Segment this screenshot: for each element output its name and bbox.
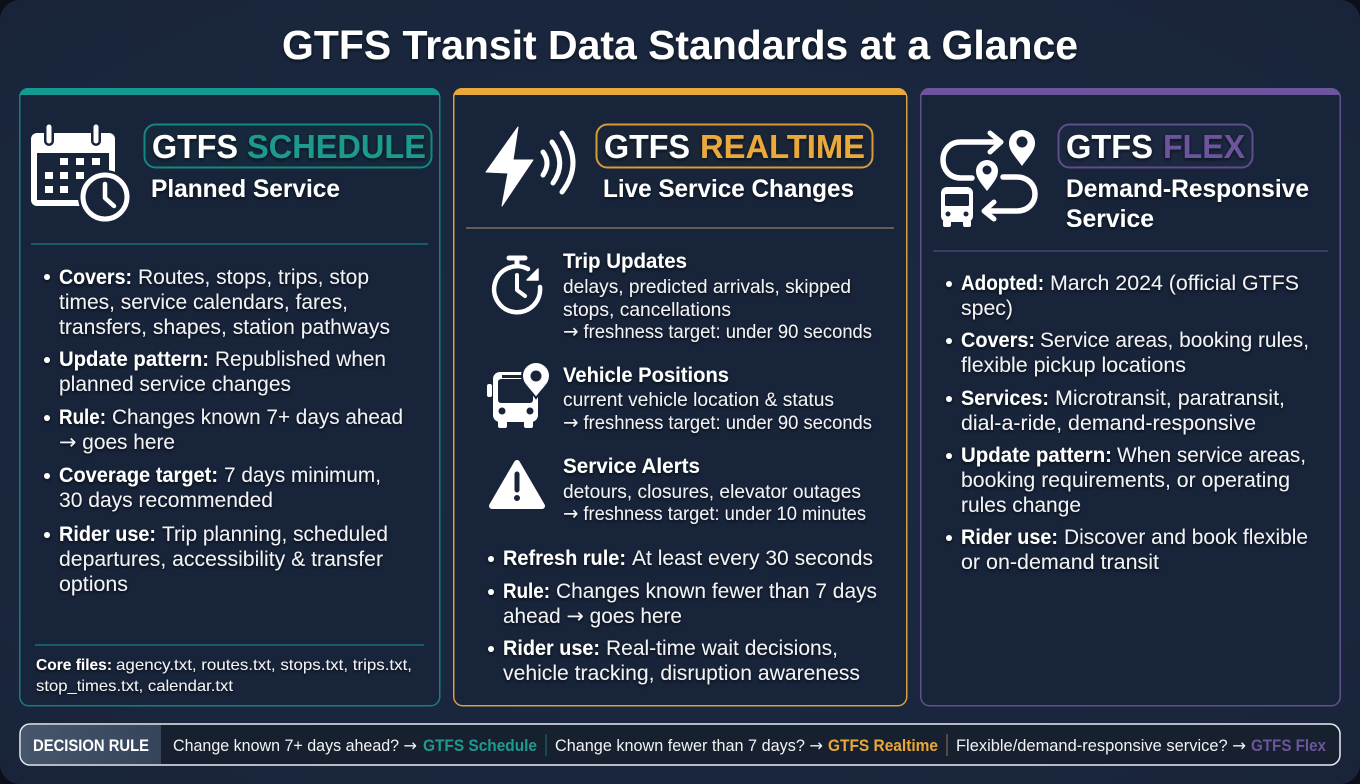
list: schedule facts: Covers: <box>59 266 132 289</box>
panel: GTFS Realtime <box>453 88 907 706</box>
rule: schedule: Change known 7+ days ahead? → <box>173 736 417 755</box>
list: flex facts: Microtransit, paratransit, <box>1055 387 1285 410</box>
badge: GTFS Flex <box>1058 124 1252 168</box>
item: service alerts <box>492 455 866 525</box>
text: trip updates: delays, predicted arrivals, skipped <box>563 276 851 298</box>
list: schedule facts: transfers, shapes, station pathways <box>59 316 390 339</box>
rule: realtime: GTFS Realtime <box>828 737 938 755</box>
text: trip updates: → freshness target: under 90 seconds <box>563 320 872 343</box>
list: schedule facts: Routes, stops, trips, stop <box>138 266 369 289</box>
subtitle: Planned Service: Planned Service <box>151 175 340 203</box>
decision rule bar <box>20 724 1340 765</box>
list: schedule facts: Update pattern: <box>59 348 209 371</box>
list: schedule facts <box>44 266 403 596</box>
list: flex facts: spec) <box>961 297 1013 320</box>
list: schedule facts: departures, accessibility & transfer <box>59 548 383 571</box>
text: trip updates <box>563 250 872 343</box>
subtitle: Demand-Responsive Service: Service <box>1066 205 1154 233</box>
list: schedule facts: Trip planning, scheduled <box>162 523 388 546</box>
text: vehicle positions <box>563 364 872 434</box>
core files note: Core files: <box>36 657 112 674</box>
list: schedule facts: Republished when <box>215 348 386 371</box>
text: service alerts: Service Alerts <box>563 455 700 478</box>
list: schedule facts: Changes known 7+ days ahead <box>112 406 403 429</box>
panel frame <box>453 88 907 706</box>
icon: lightning bolt with signal waves <box>486 127 573 206</box>
list: flex facts <box>946 272 1309 574</box>
list: flex facts: rules change <box>961 494 1081 517</box>
icon: stopwatch <box>494 258 540 312</box>
text: vehicle positions: current vehicle location & status <box>563 389 834 411</box>
badge: GTFS Schedule: GTFS <box>152 128 238 165</box>
text: service alerts <box>563 455 866 525</box>
list: flex facts: Discover and book flexible <box>1064 526 1308 549</box>
list: schedule facts: Coverage target: <box>59 464 218 487</box>
list: realtime facts: At least every 30 seconds <box>632 547 873 570</box>
rule: schedule <box>173 736 537 755</box>
list: realtime facts: ahead → goes here <box>503 604 682 628</box>
title: GTFS Transit Data Standards at a Glance <box>282 22 1078 68</box>
list: flex facts: March 2024 (official GTFS <box>1050 272 1299 295</box>
core files note: agency.txt, routes.txt, stops.txt, trips.txt, <box>116 657 412 674</box>
decision rule label: DECISION RULE <box>33 737 149 755</box>
list: realtime facts: Real-time wait decisions, <box>606 637 838 660</box>
list: schedule facts: Rider use: <box>59 523 156 546</box>
text: service alerts: → freshness target: under 10 minutes <box>563 502 866 525</box>
list: realtime facts: Rider use: <box>503 637 600 660</box>
text: trip updates: Trip Updates <box>563 250 687 273</box>
list: flex facts: Services: <box>961 387 1049 410</box>
badge: GTFS Realtime <box>596 124 872 168</box>
list: flex facts: dial-a-ride, demand-responsive <box>961 412 1256 435</box>
icon: calendar with clock <box>31 127 132 224</box>
list: flex facts: Rider use: <box>961 526 1058 549</box>
list: schedule facts: → goes here <box>59 430 175 454</box>
list: flex facts: Adopted: <box>961 272 1044 295</box>
list: flex facts: When service areas, <box>1117 444 1306 467</box>
rule: flex: Flexible/demand-responsive service? → <box>956 736 1246 755</box>
list: flex facts: Covers: <box>961 329 1035 352</box>
icon: warning triangle <box>492 463 542 506</box>
list: schedule facts: times, service calendars, fares, <box>59 291 348 314</box>
list: schedule facts: Rule: <box>59 406 106 429</box>
list: realtime facts: Rule: <box>503 580 550 603</box>
text: vehicle positions: → freshness target: under 90 seconds <box>563 411 872 434</box>
list: flex facts: flexible pickup locations <box>961 354 1186 377</box>
list: flex facts: or on-demand transit <box>961 551 1159 574</box>
subtitle: Demand-Responsive Service <box>1066 175 1309 233</box>
list: schedule facts: options <box>59 573 128 596</box>
panel: GTFS Schedule <box>19 88 440 706</box>
panel frame <box>920 88 1340 706</box>
core files note <box>36 657 412 695</box>
rule: schedule: GTFS Schedule <box>423 737 537 755</box>
badge: GTFS Schedule: SCHEDULE <box>247 128 426 165</box>
text: trip updates: stops, cancellations <box>563 299 731 321</box>
badge: GTFS Flex: FLEX <box>1163 128 1245 165</box>
icon: routes, pins and bus <box>941 130 1035 227</box>
core files note: stop_times.txt, calendar.txt <box>36 678 234 695</box>
icon: bus with location pin <box>487 362 550 428</box>
panel: GTFS Flex <box>920 88 1340 706</box>
badge: GTFS Flex: GTFS <box>1066 128 1153 165</box>
subtitle: Live Service Changes: Live Service Changes <box>603 175 854 203</box>
list: realtime facts <box>488 547 877 685</box>
badge: GTFS Realtime: REALTIME <box>700 128 865 165</box>
list: schedule facts: 30 days recommended <box>59 489 273 512</box>
subtitle: Demand-Responsive Service: Demand-Responsive <box>1066 175 1309 203</box>
text: service alerts: detours, closures, elevator outages <box>563 481 861 503</box>
panel frame <box>19 88 440 706</box>
rule: realtime: Change known fewer than 7 days? → <box>555 736 823 755</box>
text: vehicle positions: Vehicle Positions <box>563 364 729 387</box>
badge: GTFS Schedule <box>144 124 432 168</box>
list: realtime facts: Changes known fewer than 7 days <box>556 580 877 603</box>
list: realtime facts: vehicle tracking, disruption awareness <box>503 662 860 685</box>
badge: GTFS Realtime: GTFS <box>604 128 690 165</box>
list: flex facts: booking requirements, or operating <box>961 469 1290 492</box>
list: schedule facts: 7 days minimum, <box>224 464 381 487</box>
rule: flex: GTFS Flex <box>1251 737 1327 755</box>
item: trip updates <box>494 250 872 343</box>
item: vehicle positions <box>487 362 872 434</box>
decision rule label <box>21 725 161 764</box>
list: flex facts: Update pattern: <box>961 444 1112 467</box>
list: realtime facts: Refresh rule: <box>503 547 626 570</box>
list: flex facts: Service areas, booking rules, <box>1040 329 1309 352</box>
list: schedule facts: planned service changes <box>59 373 291 396</box>
